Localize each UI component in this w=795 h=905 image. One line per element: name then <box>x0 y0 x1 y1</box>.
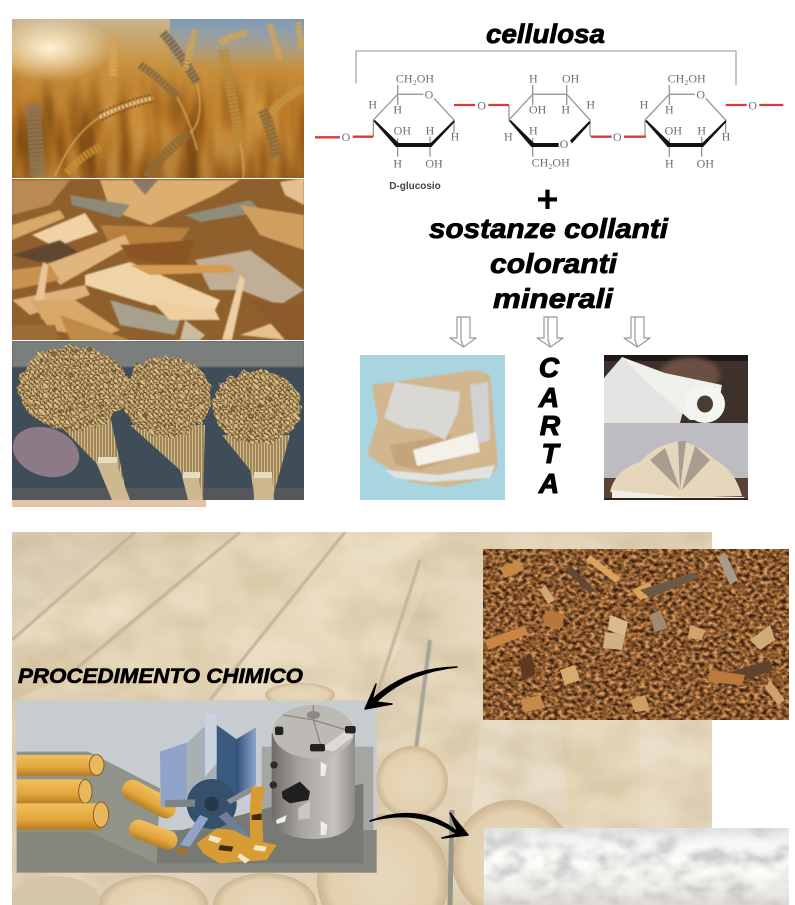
atom labels: OH <box>697 156 714 170</box>
text: additional substances: minerali <box>493 283 614 314</box>
atom labels: H <box>368 97 377 111</box>
atom labels: CH₂OH <box>532 156 570 170</box>
atom labels: CH₂OH <box>668 72 706 86</box>
stone <box>12 426 80 478</box>
photo: waste paper and cardboard <box>360 355 505 500</box>
text: CARTA vertical: R <box>540 410 561 441</box>
atom labels: H <box>561 102 570 116</box>
atom labels: H <box>586 97 595 111</box>
diagram: chipping machine <box>17 701 377 873</box>
text: CARTA vertical <box>538 352 561 499</box>
atom labels: H <box>393 156 402 170</box>
strip under photo column <box>12 500 206 507</box>
photo: paper roll <box>604 355 748 423</box>
panel: faded log background <box>10 532 712 905</box>
atom labels: H <box>529 72 538 86</box>
text: additional substances: coloranti <box>490 248 618 279</box>
atom labels: O <box>425 88 434 102</box>
tank <box>270 705 356 839</box>
atom labels: O <box>560 137 569 151</box>
bracket <box>356 51 736 85</box>
icon: hollow arrow left <box>450 317 476 347</box>
icon: hollow arrow right <box>624 317 650 347</box>
photo: wood chips <box>12 178 304 340</box>
atom labels: O <box>696 88 705 102</box>
heading: procedimento chimico: PROCEDIMENTO CHIMICO <box>18 665 303 688</box>
atom labels: H <box>529 123 538 137</box>
atom labels: H <box>665 102 674 116</box>
atom labels: OH <box>394 123 411 137</box>
bold bonds <box>373 120 726 147</box>
photo: flax bundles <box>6 341 304 500</box>
plus sign: + <box>536 179 559 221</box>
photo: wheat field <box>0 14 304 178</box>
label: D-glucosio: D-glucosio <box>389 181 441 192</box>
atom labels: H <box>722 130 731 144</box>
chart: cellulose molecule <box>315 51 783 192</box>
atom labels: O <box>748 98 757 112</box>
red glycosidic links <box>315 105 783 137</box>
atom labels: H <box>640 97 649 111</box>
arrow: chips to process <box>365 667 457 709</box>
atom labels: O <box>342 130 351 144</box>
text: CARTA vertical: A <box>538 468 559 499</box>
ring bonds <box>373 85 726 157</box>
atom labels: OH <box>665 123 682 137</box>
photo: cellulose pulp <box>484 828 789 905</box>
wood chips <box>177 787 277 863</box>
rotor <box>160 712 257 847</box>
text: CARTA vertical: A <box>538 382 559 413</box>
arrow: process to pulp <box>370 813 468 838</box>
atom labels: H <box>393 102 402 116</box>
floor <box>17 830 377 873</box>
text: CARTA vertical: T <box>541 438 561 469</box>
atom labels: O <box>613 130 622 144</box>
atom labels: H <box>426 123 435 137</box>
text: CARTA vertical: C <box>539 352 560 383</box>
logs <box>17 755 180 852</box>
atom labels: O <box>477 98 486 112</box>
icon: hollow arrow middle <box>537 317 563 347</box>
atom labels: CH₂OH <box>396 72 434 86</box>
text: additional substances <box>429 213 669 314</box>
atom labels: OH <box>425 156 443 170</box>
atom labels <box>342 72 757 170</box>
atom labels: H <box>697 123 706 137</box>
atom labels: OH <box>529 102 547 116</box>
photo: wood chips pile <box>483 549 789 720</box>
atom labels: H <box>504 130 513 144</box>
heading: cellulosa: cellulosa <box>486 19 605 49</box>
atom labels: OH <box>562 72 580 86</box>
text: additional substances: sostanze collanti <box>429 213 669 244</box>
atom labels: H <box>665 156 674 170</box>
atom labels: H <box>451 130 460 144</box>
photo: open book <box>604 423 748 500</box>
